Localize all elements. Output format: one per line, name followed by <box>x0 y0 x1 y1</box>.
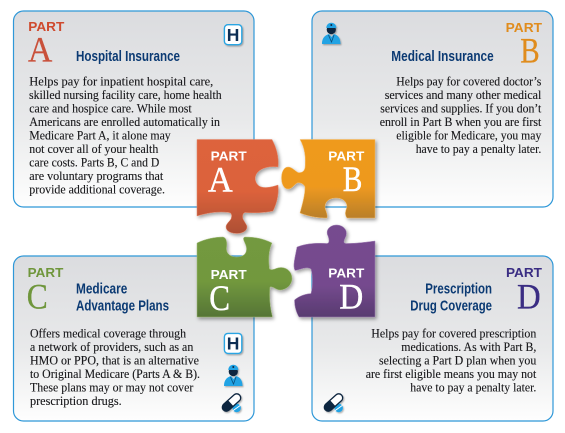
puzzle piece D: D <box>339 276 363 316</box>
puzzle piece A <box>197 140 278 234</box>
puzzle piece D: PART <box>328 266 364 281</box>
icon: doctor <box>322 23 340 44</box>
panel: Part C Medicare Advantage Plans: C <box>27 276 48 316</box>
panel: Part C Medicare Advantage Plans: prescription drugs. <box>30 394 122 408</box>
panel: Part C Medicare Advantage Plans: a network of providers, such as an <box>30 340 193 354</box>
panel: Part C Medicare Advantage Plans: PART <box>28 265 63 280</box>
panel: Part D Prescription Drug Coverage: are first eligible means you may not <box>366 367 537 381</box>
panel: Part C Medicare Advantage Plans: Offers medical coverage through <box>30 327 187 341</box>
panel: Part D Prescription Drug Coverage: selecting a Part D plan when you <box>379 354 536 368</box>
puzzle piece A: A <box>208 160 233 200</box>
panel: Part D Prescription Drug Coverage: Drug Coverage <box>410 297 492 314</box>
panel: Part B Medical Insurance: enroll in Part B when you are first <box>380 115 542 129</box>
puzzle piece B: PART <box>328 149 364 164</box>
panel: Part C Medicare Advantage Plans: HMO or PPO, that is an alternative <box>30 354 199 368</box>
panel: Part B Medical Insurance: have to pay a penalty later. <box>416 142 541 156</box>
panel: Part D Prescription Drug Coverage: medications. As with Part B, <box>401 340 536 354</box>
puzzle piece C <box>197 237 292 318</box>
panel: Part A Hospital Insurance <box>14 11 254 207</box>
icon: hospital H: H <box>227 334 239 354</box>
panel: Part B Medical Insurance: services and supplies. If you don’t <box>380 102 542 116</box>
panel: Part C Medicare Advantage Plans: Advantage Plans <box>76 297 169 314</box>
panel: Part D Prescription Drug Coverage: have to pay a penalty later. <box>410 380 536 394</box>
puzzle piece D <box>294 225 375 317</box>
panel: Part C Medicare Advantage Plans <box>14 256 254 421</box>
panel: Part D Prescription Drug Coverage: Helps pay for covered prescription <box>371 327 536 341</box>
panel: Part C Medicare Advantage Plans: Medicare <box>76 280 127 297</box>
panel: Part A Hospital Insurance: PART <box>28 19 64 34</box>
icon: pills <box>221 392 242 413</box>
panel: Part B Medical Insurance: B <box>520 30 540 70</box>
puzzle piece A: PART <box>211 149 247 164</box>
panel: Part A Hospital Insurance: Helps pay for inpatient hospital care, <box>29 75 213 89</box>
icon: pills <box>323 392 344 413</box>
panel: Part B Medical Insurance: services and many other medical <box>385 88 542 102</box>
panel: Part D Prescription Drug Coverage: PART <box>506 265 542 280</box>
panel: Part B Medical Insurance <box>312 11 553 207</box>
icon: hospital H: H <box>227 25 239 45</box>
panel: Part B Medical Insurance: eligible for Medicare, you may <box>396 128 542 142</box>
panel: Part A Hospital Insurance: are voluntary programs that <box>29 169 164 183</box>
panel: Part A Hospital Insurance: skilled nursing facility care, home health <box>29 88 222 102</box>
puzzle piece C: C <box>209 278 230 318</box>
puzzle piece B <box>282 140 375 218</box>
panel: Part A Hospital Insurance: Americans are enrolled automatically in <box>29 115 220 129</box>
panel: Part A Hospital Insurance: provide additional coverage. <box>29 182 165 196</box>
panel: Part B Medical Insurance: Medical Insurance <box>391 48 494 65</box>
panel: Part B Medical Insurance: PART <box>506 20 542 35</box>
panel: Part C Medicare Advantage Plans: These plans may or may not cover <box>30 380 194 394</box>
icon: doctor <box>224 365 242 386</box>
panel: Part A Hospital Insurance: not cover all of your health <box>29 142 159 156</box>
panel: Part A Hospital Insurance: Medicare Part A, it alone may <box>29 128 171 142</box>
panel: Part A Hospital Insurance: care and hospice care. While most <box>29 102 192 116</box>
panel: Part D Prescription Drug Coverage: D <box>517 276 541 316</box>
panel: Part A Hospital Insurance: Hospital Insurance <box>76 48 180 65</box>
puzzle piece C: PART <box>211 267 247 282</box>
panel: Part D Prescription Drug Coverage <box>312 256 553 421</box>
panel: Part A Hospital Insurance: A <box>28 30 52 70</box>
panel: Part C Medicare Advantage Plans: to Original Medicare (Parts A & B). <box>30 367 200 381</box>
puzzle piece B: B <box>343 159 362 199</box>
panel: Part A Hospital Insurance: care costs. Parts B, C and D <box>29 155 159 169</box>
panel: Part B Medical Insurance: Helps pay for covered doctor’s <box>396 75 541 89</box>
panel: Part D Prescription Drug Coverage: Prescription <box>425 280 492 297</box>
